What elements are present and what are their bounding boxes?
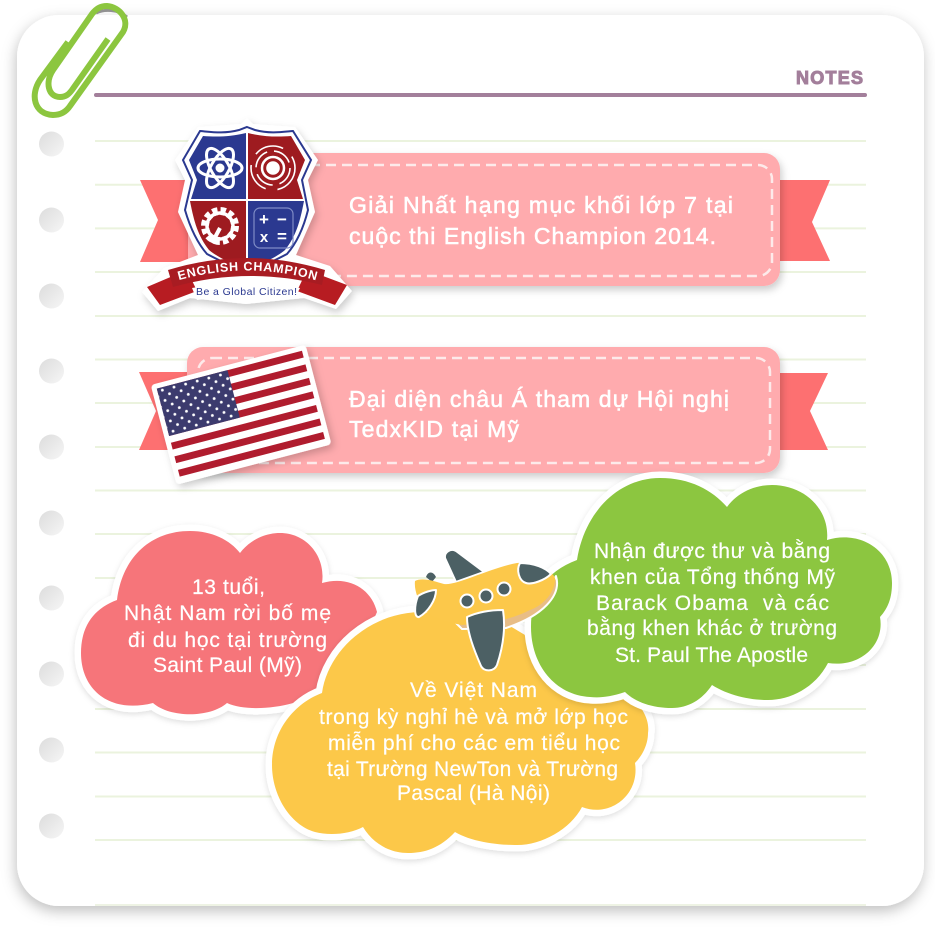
- icon: calculator: x: [260, 229, 269, 246]
- panel: tedxkid conference: [139, 347, 828, 473]
- punched holes: [39, 132, 64, 838]
- study abroad text: đi du học tại trường: [128, 629, 327, 652]
- icon: atom: [198, 144, 242, 192]
- icon: calculator: =: [277, 227, 287, 246]
- champion banner: ENGLISH CHAMPION: [178, 262, 318, 280]
- awards text: bằng khen khác ở trường: [587, 617, 837, 640]
- ribbon tail right: [770, 373, 828, 450]
- award text: Giải Nhất hạng mục khối lớp 7 tại: [349, 192, 733, 218]
- awards text: [587, 540, 837, 667]
- champion banner: Be a Global Citizen!: [196, 286, 297, 298]
- heading: notes: NOTES: [796, 68, 863, 88]
- study abroad text: Nhật Nam rời bố mẹ: [124, 602, 331, 625]
- conference text: TedxKID tại Mỹ: [349, 416, 520, 442]
- ribbon tail left: [140, 180, 210, 262]
- return text: Về Việt Nam: [410, 679, 537, 702]
- icon: calculator: +: [259, 210, 269, 229]
- icon: paperclip: [35, 6, 127, 115]
- dashed border: [198, 358, 770, 463]
- dashed border: [200, 165, 772, 276]
- pink card: [188, 153, 780, 286]
- conference text: [349, 386, 729, 442]
- conference text: Đại diện châu Á tham dự Hội nghị: [349, 386, 729, 412]
- header rule: [94, 93, 867, 97]
- return text: trong kỳ nghỉ hè và mở lớp học: [319, 706, 628, 729]
- icon: calculator: −: [277, 210, 287, 229]
- cloud: return to vietnam: [272, 612, 648, 853]
- icon: us flag: [151, 345, 331, 485]
- awards text: khen của Tổng thống Mỹ: [590, 566, 836, 589]
- return text: Pascal (Hà Nội): [397, 782, 550, 805]
- pink card: [187, 347, 780, 473]
- return text: tại Trường NewTon và Trường: [327, 758, 618, 781]
- study abroad text: [124, 576, 331, 677]
- icon: english champion shield: [142, 121, 356, 317]
- cloud: study abroad: [81, 531, 377, 714]
- study abroad text: Saint Paul (Mỹ): [153, 654, 302, 677]
- icon: gear: [205, 211, 235, 243]
- award text: [349, 192, 733, 249]
- champion banner: [147, 258, 347, 305]
- return text: miễn phí cho các em tiểu học: [328, 732, 620, 755]
- ribbon tail left: [139, 372, 210, 450]
- return text: [319, 679, 628, 805]
- awards text: Barack Obama và các: [596, 592, 829, 615]
- cloud: awards from president: [531, 478, 892, 708]
- award text: cuộc thi English Champion 2014.: [349, 223, 716, 249]
- awards text: Nhận được thư và bằng: [594, 540, 830, 563]
- study abroad text: 13 tuổi,: [192, 576, 265, 599]
- ribbon tail right: [770, 180, 830, 261]
- panel: english champion award: [140, 153, 830, 286]
- icon: rings: [251, 146, 295, 190]
- awards text: St. Paul The Apostle: [615, 644, 808, 667]
- icon: airplane: [415, 550, 557, 670]
- icon: calculator: [254, 208, 293, 248]
